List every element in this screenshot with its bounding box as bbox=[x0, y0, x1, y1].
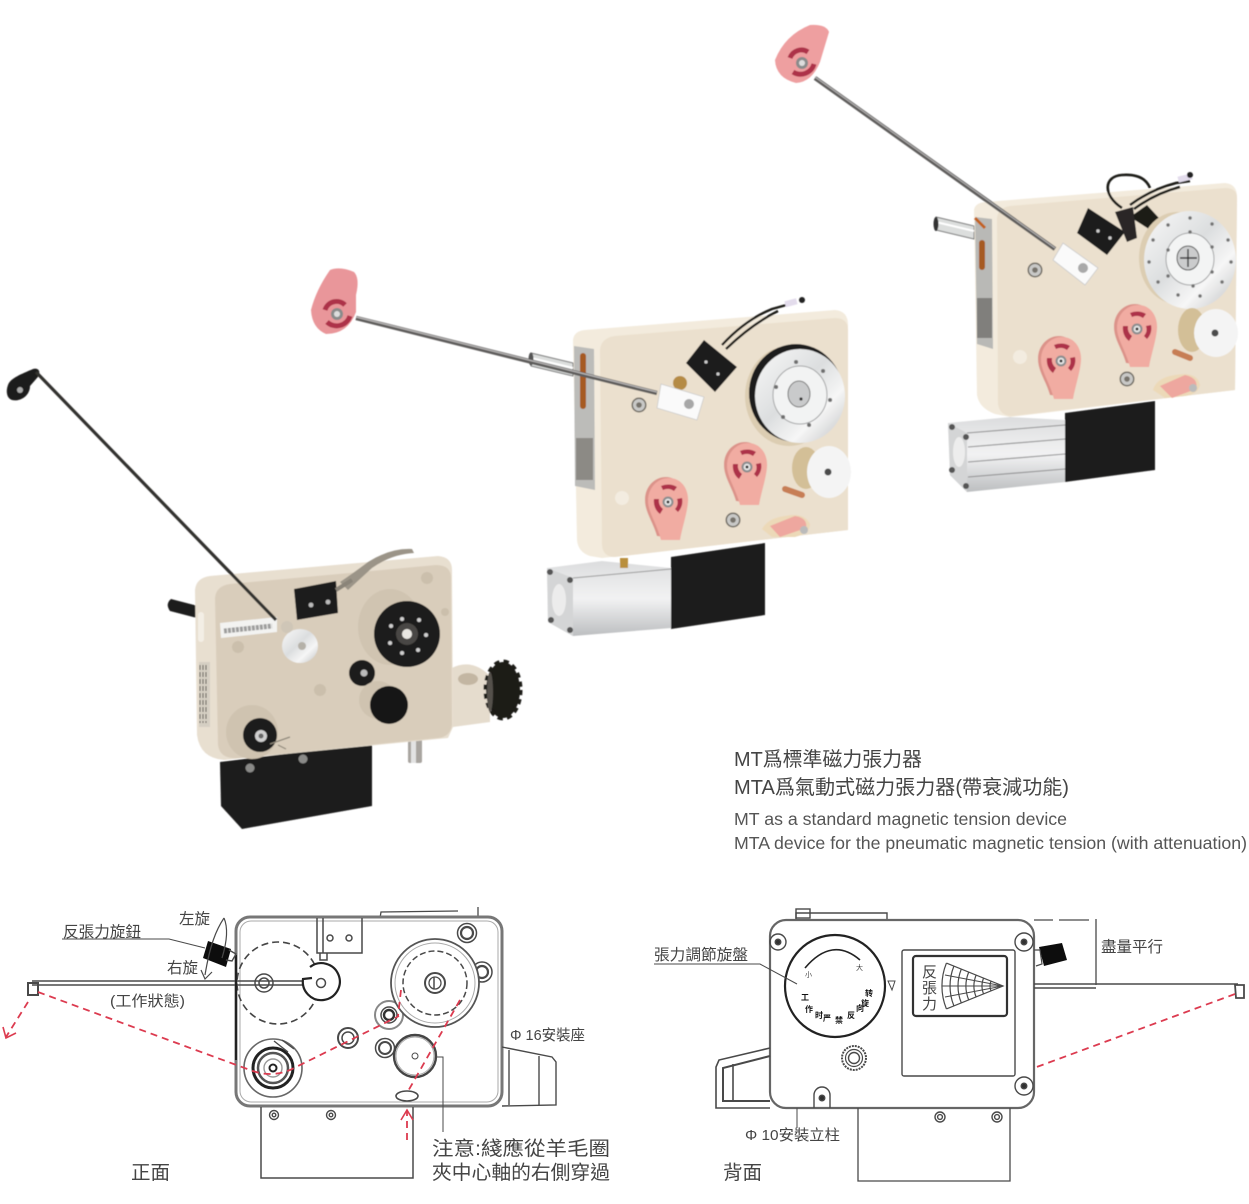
wire loop bbox=[1108, 172, 1193, 209]
main silver disc bbox=[745, 344, 845, 446]
bracket bbox=[317, 918, 362, 960]
description text block bbox=[734, 748, 1247, 853]
back view labels: Φ 10安裝立柱 bbox=[745, 1127, 840, 1144]
black base block bbox=[220, 743, 372, 829]
corner screws bbox=[770, 933, 1033, 1108]
small pink lever bbox=[762, 515, 810, 537]
rear panel bbox=[902, 950, 1015, 1076]
silver pneumatic cylinder bbox=[948, 417, 1065, 492]
rings bbox=[255, 924, 492, 1058]
white sticker bbox=[220, 617, 277, 638]
back view labels: 小 bbox=[805, 970, 812, 979]
large disc bbox=[391, 939, 479, 1027]
main body outline bbox=[236, 917, 502, 1106]
dashed circle bbox=[237, 942, 319, 1024]
product photo: MT tension device (left) bbox=[7, 369, 520, 829]
front view labels: 正面 bbox=[131, 1162, 170, 1184]
technical drawing: back view bbox=[654, 909, 1244, 1181]
pulley bbox=[1175, 308, 1238, 358]
English description: MTA device for the pneumatic magnetic tension (with attenuation) bbox=[734, 833, 1247, 853]
front view labels: 左旋 bbox=[179, 910, 211, 928]
bottom block bbox=[858, 1108, 1010, 1181]
front view labels: 反張力旋鈕 bbox=[63, 923, 141, 941]
back view labels: 力 bbox=[922, 996, 937, 1013]
bottom block bbox=[261, 1107, 413, 1178]
small roller bbox=[281, 621, 318, 663]
arm rod bbox=[1034, 984, 1244, 998]
body bbox=[974, 183, 1237, 417]
lugs bbox=[270, 1110, 336, 1120]
Chinese description: MT爲標準磁力張力器 bbox=[734, 748, 922, 771]
brass fitting bbox=[620, 558, 628, 568]
black eyelet bbox=[7, 369, 39, 400]
white block bbox=[1053, 243, 1098, 285]
arm rod bbox=[28, 981, 302, 995]
white block bbox=[657, 376, 704, 420]
mounting pin bbox=[408, 735, 422, 763]
big black knob bbox=[359, 681, 408, 724]
back view labels: 反 bbox=[922, 964, 937, 981]
small pink lever bbox=[1153, 374, 1200, 398]
front view labels: Φ 16安裝座 bbox=[510, 1027, 585, 1044]
pulley bbox=[785, 446, 851, 498]
product photo: MTA tension device (right) bbox=[775, 25, 1238, 492]
top wire detail bbox=[364, 907, 478, 932]
rod with pink end bbox=[775, 25, 1055, 249]
body bbox=[573, 310, 848, 558]
glass tube bbox=[528, 352, 573, 376]
tension knob bbox=[1034, 943, 1067, 966]
technical drawing: front view bbox=[3, 907, 556, 1178]
anti-tension gauge window bbox=[913, 956, 1007, 1016]
black block bbox=[1065, 401, 1155, 482]
bolts bbox=[1013, 350, 1134, 386]
tension knob bbox=[203, 941, 236, 967]
side label with slot bbox=[574, 346, 595, 490]
main silver disc bbox=[1139, 211, 1236, 309]
red thread path bbox=[6, 990, 460, 1140]
tension dial bbox=[785, 935, 895, 1037]
back view labels: 盡量平行 bbox=[1101, 938, 1163, 956]
back view labels: 張 bbox=[922, 980, 937, 997]
top fitting bbox=[796, 909, 887, 919]
screw bbox=[1028, 262, 1042, 278]
clamp and knurled knob bbox=[452, 662, 520, 727]
front view labels: 右旋 bbox=[167, 959, 199, 977]
mounting seat bbox=[502, 1047, 556, 1106]
English description: MT as a standard magnetic tension device bbox=[734, 809, 1067, 829]
Chinese description: MTA爲氣動式磁力張力器(帶衰減功能) bbox=[734, 776, 1069, 799]
back view labels: 背面 bbox=[723, 1162, 762, 1184]
rotate arrow bbox=[201, 918, 227, 979]
front view labels: (工作狀態) bbox=[110, 993, 185, 1010]
pulley bbox=[394, 1035, 436, 1077]
Chinese description bbox=[734, 748, 1069, 799]
thread slot bbox=[396, 1091, 418, 1101]
black connector bbox=[686, 340, 737, 392]
silver pneumatic cylinder bbox=[547, 561, 671, 636]
wire harness bbox=[722, 297, 805, 349]
parallel dimension lines bbox=[1034, 919, 1096, 985]
pink tension cams bbox=[645, 442, 767, 540]
spring spool bbox=[244, 1039, 302, 1097]
side label with slot bbox=[975, 217, 993, 349]
English description bbox=[734, 809, 1247, 853]
red arrowheads bbox=[3, 1027, 413, 1120]
front view labels: 注意:綫應從羊毛圈 bbox=[432, 1137, 610, 1160]
center screw bbox=[842, 1046, 866, 1070]
bolts bbox=[615, 491, 740, 528]
back view labels bbox=[654, 938, 1163, 1184]
left mount bbox=[716, 1048, 770, 1108]
main body outline bbox=[770, 920, 1034, 1108]
glass tube bbox=[934, 217, 974, 239]
rod with pink end bbox=[311, 268, 657, 393]
side knob bbox=[168, 599, 198, 618]
side slot and side label bbox=[198, 612, 210, 727]
black connector bbox=[294, 580, 352, 620]
front view labels: 夾中心軸的右側穿過 bbox=[432, 1162, 610, 1184]
side wall bbox=[235, 955, 237, 1060]
black block bbox=[671, 543, 765, 629]
black connectors bbox=[1077, 205, 1170, 255]
back view labels: 工作时严禁反向旋转 bbox=[801, 988, 873, 1025]
body bbox=[195, 549, 453, 760]
bolts on face bbox=[232, 572, 449, 696]
front view labels bbox=[63, 910, 610, 1184]
red thread bbox=[1034, 994, 1235, 1068]
pink tension cams bbox=[1038, 304, 1157, 399]
product photo: MTA tension device (center) bbox=[311, 268, 851, 636]
small black knob bbox=[349, 660, 375, 686]
main black disc bbox=[358, 589, 440, 667]
lugs bbox=[935, 1112, 1002, 1122]
leader lines bbox=[654, 964, 797, 1128]
spring spool bbox=[226, 705, 290, 759]
back view labels: 張力調節旋盤 bbox=[654, 945, 748, 964]
leader lines bbox=[62, 939, 443, 1132]
screw bbox=[632, 398, 646, 412]
back view labels: 大 bbox=[856, 963, 863, 972]
cam wheel bbox=[303, 963, 340, 1000]
rod bbox=[36, 372, 276, 620]
